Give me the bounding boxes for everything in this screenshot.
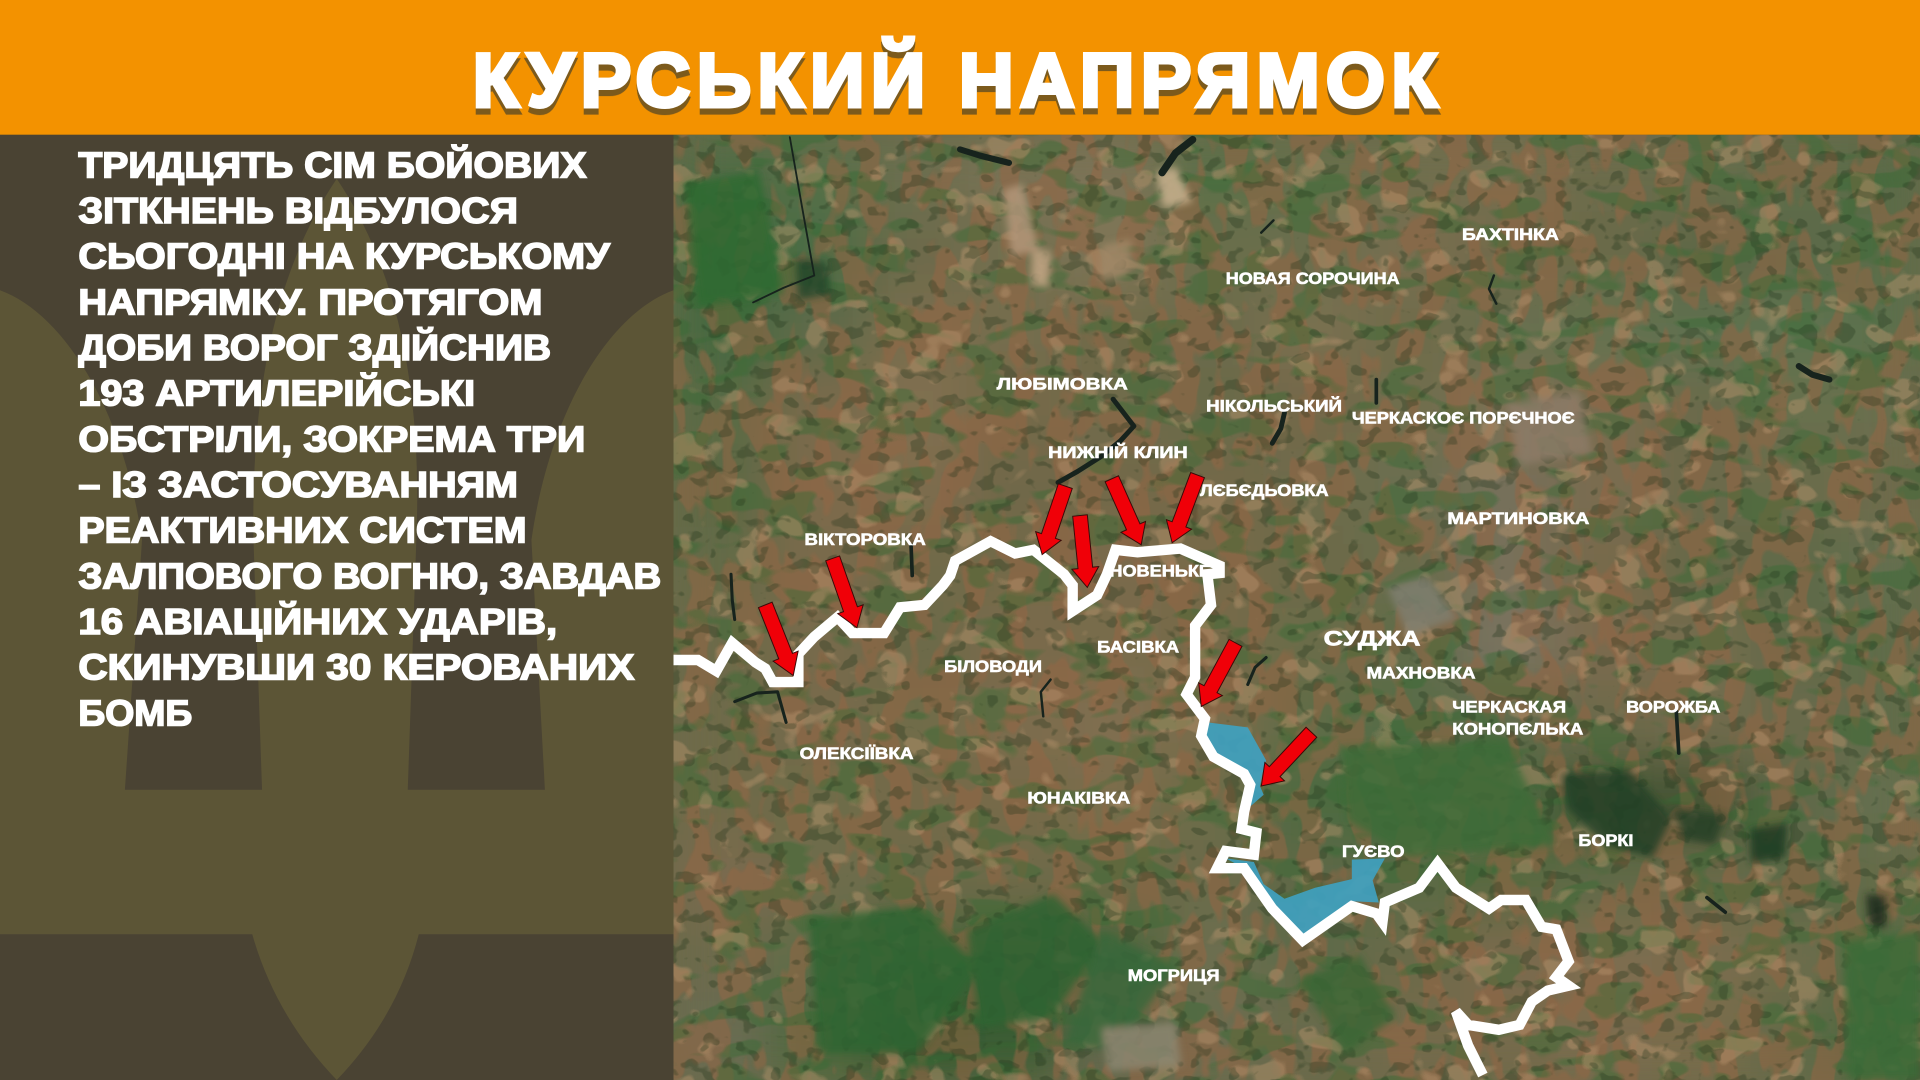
map base colour [673, 135, 1920, 1080]
settlement labels: ЧЕРКАСКОЄ ПОРЄЧНОЄ [1352, 410, 1575, 428]
settlement labels: ВІКТОРОВКА [804, 531, 926, 549]
arrow 1: towards border west [758, 602, 799, 676]
occupied area: north-east of border [1206, 722, 1266, 806]
settlement labels: БІЛОВОДИ [944, 658, 1042, 676]
arrow 2: Viktorovka [825, 555, 864, 628]
panel body text: РЕАКТИВНИХ СИСТЕМ [78, 510, 527, 551]
panel body text [78, 143, 661, 733]
settlement labels: СУДЖА [1324, 626, 1420, 650]
panel body text: СКИНУВШИ 30 КЕРОВАНИХ [78, 647, 634, 688]
settlement labels: БОРКІ [1578, 832, 1633, 850]
panel body text: СЬОГОДНІ НА КУРСЬКОМУ [78, 236, 610, 277]
settlement labels: БАСІВКА [1097, 639, 1180, 657]
panel body text: НАПРЯМКУ. ПРОТЯГОМ [78, 281, 542, 322]
settlement labels: ГУЄВО [1342, 843, 1404, 861]
panel body text: ЗАЛПОВОГО ВОГНЮ, ЗАВДАВ [78, 555, 661, 596]
settlement labels: ЮНАКІВКА [1027, 789, 1131, 807]
title: КУРСЬКИЙ НАПРЯМОК [473, 38, 1438, 124]
map low-frequency terrain mosaic [673, 135, 1920, 1080]
panel background [0, 135, 673, 1080]
settlement labels: КОНОПЄЛЬКА [1452, 721, 1584, 739]
left text panel [0, 135, 673, 1080]
panel body text: ДОБИ ВОРОГ ЗДІЙСНИВ [78, 326, 551, 368]
settlement labels: БАХТІНКА [1462, 226, 1559, 244]
arrow 5: Nyzhniy Klyn east [1104, 475, 1146, 546]
occupied area: near Guyevo [1226, 858, 1385, 936]
settlement labels: МАРТИНОВКА [1447, 510, 1590, 528]
panel body text: 193 АРТИЛЕРІЙСЬКІ [78, 372, 475, 414]
settlement labels: НОВАЯ СОРОЧИНА [1226, 270, 1400, 288]
settlement labels: ОЛЕКСІЇВКА [800, 745, 914, 763]
settlement labels: ЧЕРКАСКАЯ [1452, 699, 1566, 717]
settlement labels [800, 226, 1721, 985]
settlement labels: МАХНОВКА [1367, 664, 1476, 682]
settlement labels: ВОРОЖБА [1626, 699, 1721, 717]
map field texture: ploughed soil [673, 135, 1920, 1080]
arrow 3: Nyzhniy Klyn west [1035, 483, 1073, 556]
arrow 7: south of Basivka [1198, 638, 1243, 708]
arrow 8: into blue area [1260, 726, 1318, 787]
settlement labels: НИЖНІЙ КЛИН [1048, 443, 1188, 462]
settlement labels: ЛЮБІМОВКА [997, 375, 1128, 393]
map field texture: pale bare fields [673, 135, 1920, 1080]
red attack arrows [753, 470, 1321, 795]
panel body text: 16 АВІАЦІЙНИХ УДАРІВ, [78, 600, 557, 642]
orange header band [0, 0, 1920, 135]
panel body text: ТРИДЦЯТЬ СІМ БОЙОВИХ [78, 143, 587, 185]
panel body text: ОБСТРІЛИ, ЗОКРЕМА ТРИ [78, 418, 585, 459]
panel body text: БОМБ [78, 692, 192, 733]
panel body text: ЗІТКНЕНЬ ВІДБУЛОСЯ [78, 190, 518, 231]
trident watermark [0, 179, 673, 1080]
map rivers [731, 137, 1829, 912]
arrow 4: Novenke notch [1071, 514, 1100, 588]
satellite map panel [673, 135, 1920, 1080]
panel body text: – ІЗ ЗАСТОСУВАННЯМ [78, 464, 518, 505]
settlement labels: НОВЕНЬКЕ [1109, 563, 1211, 581]
map texture: dark hedgerows [673, 135, 1920, 1080]
settlement labels: МОГРИЦЯ [1128, 967, 1220, 985]
settlement labels: НІКОЛЬСЬКИЙ [1206, 396, 1342, 415]
arrow 6: Lebedyovka [1166, 472, 1205, 544]
map field texture: green crops [673, 135, 1920, 1080]
map forests and light fields over texture [686, 167, 1920, 1080]
state border line [673, 541, 1569, 1075]
settlement labels: ЛЄБЄДЬОВКА [1200, 482, 1329, 500]
